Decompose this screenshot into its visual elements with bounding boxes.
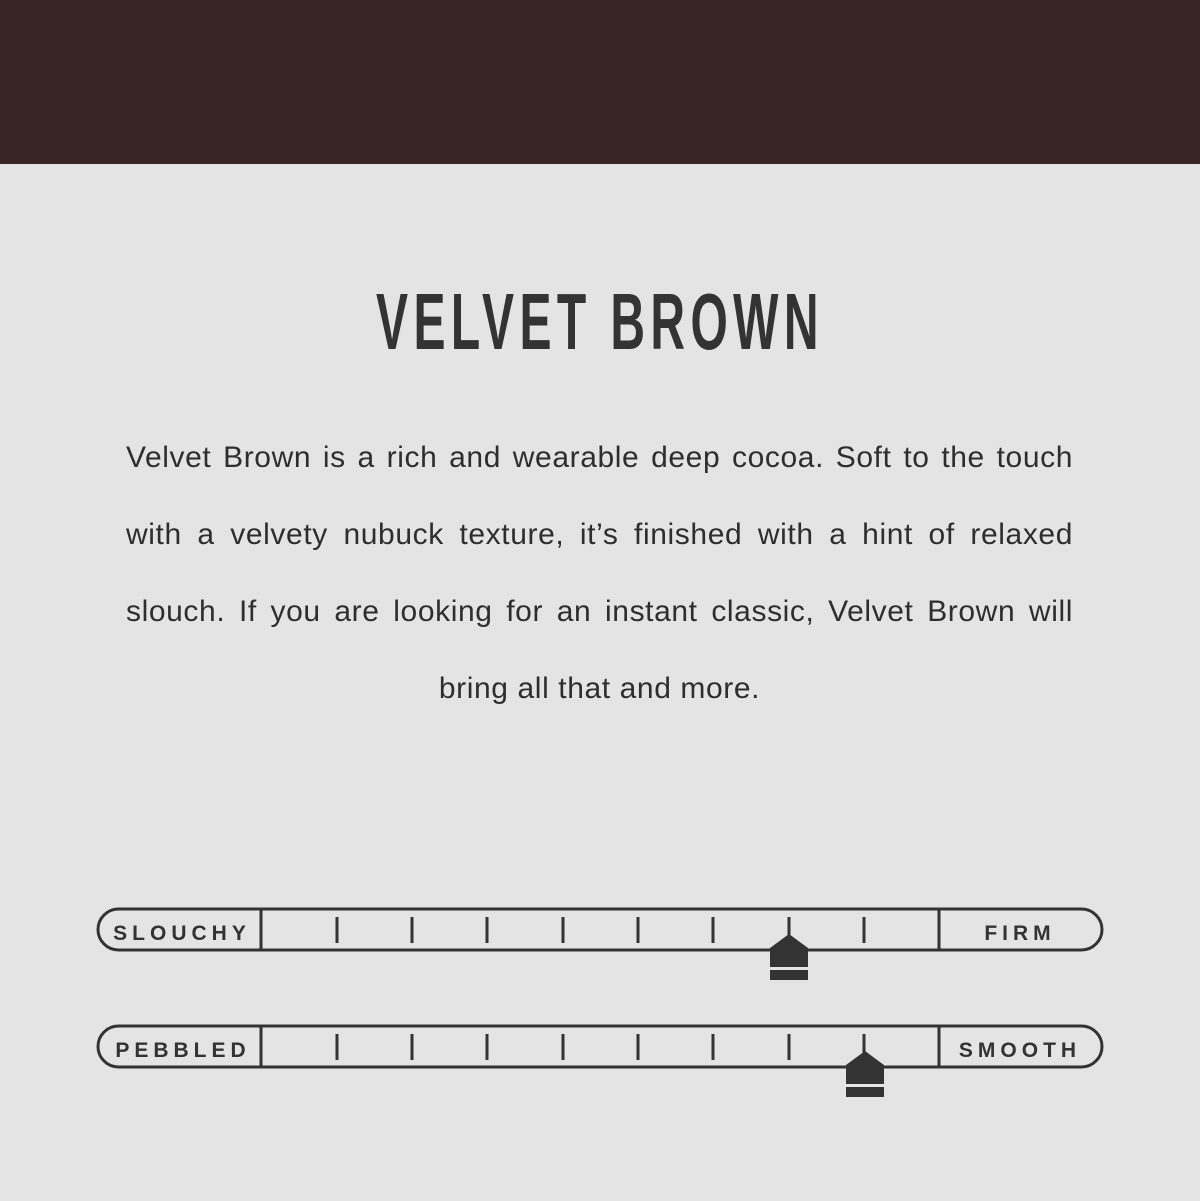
slider: slouchy-firm: FIRM	[984, 922, 1056, 945]
title: VELVET BROWN	[376, 277, 824, 366]
marker	[846, 1051, 884, 1097]
description text: Velvet Brown is a rich and wearable deep cocoa. Soft to the touch	[126, 441, 1073, 474]
description text: with a velvety nubuck texture, it’s finished with a hint of relaxed	[126, 518, 1073, 551]
description text: slouch. If you are looking for an instant classic, Velvet Brown will	[126, 595, 1073, 628]
header texture band	[0, 0, 1200, 164]
slider: slouchy-firm	[98, 909, 1102, 980]
slider: pebbled-smooth: PEBBLED	[115, 1039, 251, 1062]
slider: slouchy-firm: SLOUCHY	[113, 922, 251, 945]
description text	[126, 441, 1073, 705]
slider: pebbled-smooth	[98, 1026, 1102, 1097]
slider: pebbled-smooth: SMOOTH	[959, 1039, 1081, 1062]
marker	[770, 934, 808, 980]
description text: bring all that and more.	[439, 672, 760, 705]
